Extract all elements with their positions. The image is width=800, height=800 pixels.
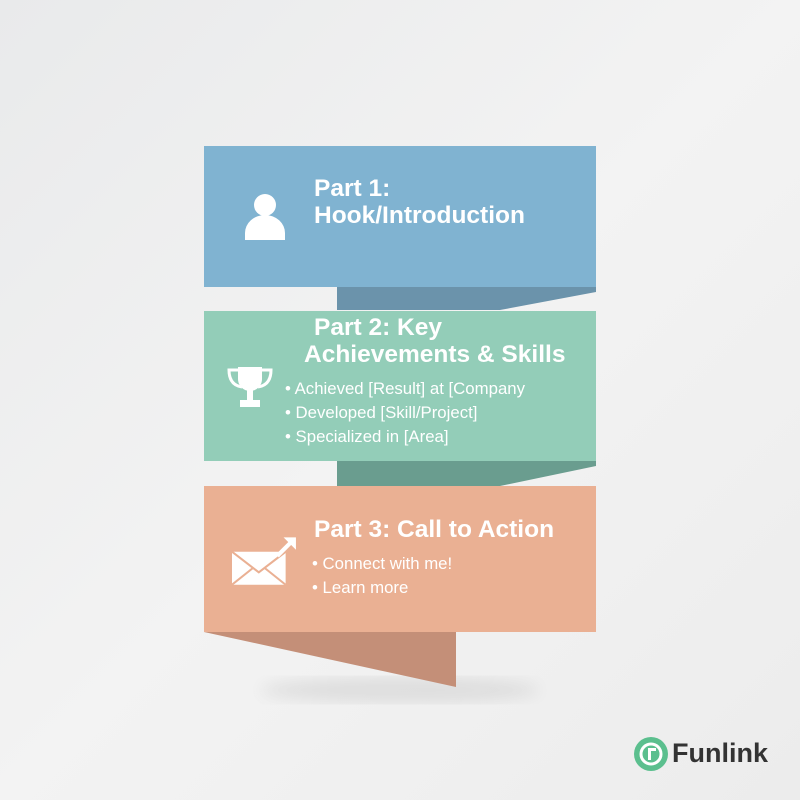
panel: part 2 <box>204 311 596 461</box>
bullets: part 2: • Specialized in [Area] <box>285 427 449 446</box>
panel: part 1 <box>204 146 596 287</box>
panel: part 2: Achievements & Skills <box>304 341 565 368</box>
logo: Funlink: Funlink <box>672 738 768 768</box>
panel: part 3 <box>204 486 596 632</box>
heading: part 1 <box>314 175 525 229</box>
icon: envelope with arrow <box>232 537 296 585</box>
bullets: part 2 <box>285 379 525 446</box>
heading: part 1: Hook/Introduction <box>314 202 525 229</box>
heading: part 2: Part 2: Key <box>314 314 442 341</box>
logo: Funlink <box>634 737 768 771</box>
heading: part 1: Part 1: <box>314 175 390 202</box>
bullets: part 3 <box>312 554 452 597</box>
heading: part 3: Part 3: Call to Action <box>314 516 554 543</box>
bullets: part 2: • Achieved [Result] at [Company <box>285 379 525 398</box>
bullets: part 2: • Developed [Skill/Project] <box>285 403 477 422</box>
icon: trophy <box>228 367 272 407</box>
icon: person <box>245 194 285 240</box>
bullets: part 3: • Connect with me! <box>312 554 452 573</box>
bullets: part 3: • Learn more <box>312 578 408 597</box>
